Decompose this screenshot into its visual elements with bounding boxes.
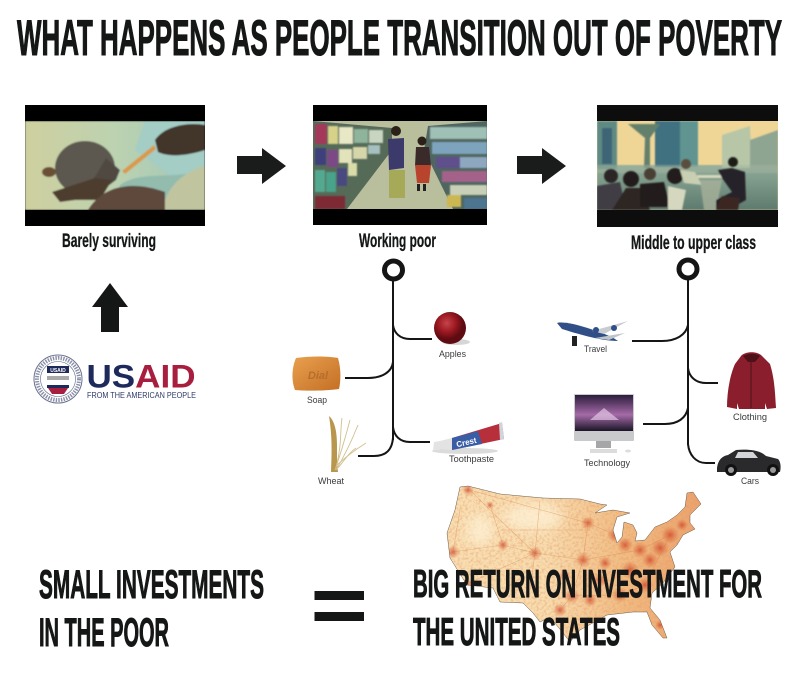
icon: airplane <box>557 321 628 346</box>
icon: soap <box>292 356 340 391</box>
logo: USAID <box>34 355 196 403</box>
icon: jacket <box>727 352 776 409</box>
arrow: to middle class <box>517 148 566 184</box>
label: cars: Cars <box>741 476 759 487</box>
label: travel: Travel <box>584 344 607 355</box>
panel: barely surviving photo <box>25 105 205 226</box>
arrow: aid to barely surviving <box>92 283 128 332</box>
label: soap: Soap <box>307 395 327 406</box>
icon: toothpaste <box>432 422 504 454</box>
statement: small investments: SMALL INVESTMENTS <box>39 563 264 607</box>
icon: soap: Dial <box>308 370 329 382</box>
panel: working poor photo <box>313 105 487 225</box>
icon: car <box>717 450 781 476</box>
USAID seal <box>34 355 82 403</box>
icon: wheat <box>329 416 366 472</box>
label: wheat: Wheat <box>318 476 344 487</box>
icon: apple <box>434 312 470 345</box>
statement: small investments <box>39 563 264 655</box>
panel: middle to upper class photo <box>597 105 778 227</box>
label: apples: Apples <box>439 349 466 360</box>
equals sign <box>314 591 364 621</box>
USAID tagline: FROM THE AMERICAN PEOPLE <box>87 390 196 400</box>
label: toothpaste: Toothpaste <box>449 454 494 465</box>
map: United States <box>446 486 702 642</box>
statement: big return: THE UNITED STATES <box>413 611 620 654</box>
diners <box>597 157 746 210</box>
label: clothing: Clothing <box>733 412 767 423</box>
arrow: to working poor <box>237 148 286 184</box>
icon: computer <box>574 394 634 453</box>
USAID seal: USAID <box>50 368 66 374</box>
caption: working poor: Working poor <box>359 231 436 252</box>
connector: middle class tree <box>632 260 718 463</box>
connector: working poor tree <box>345 261 432 456</box>
label: technology: Technology <box>584 458 630 469</box>
caption: barely surviving: Barely surviving <box>62 231 156 252</box>
left shelves <box>313 121 392 209</box>
statement: big return <box>413 563 762 654</box>
USAID wordmark: USAID <box>86 358 196 394</box>
icon: toothpaste: Crest <box>455 436 478 449</box>
shoppers <box>388 126 431 198</box>
right shelves <box>424 121 487 209</box>
statement: small investments: IN THE POOR <box>39 611 169 655</box>
